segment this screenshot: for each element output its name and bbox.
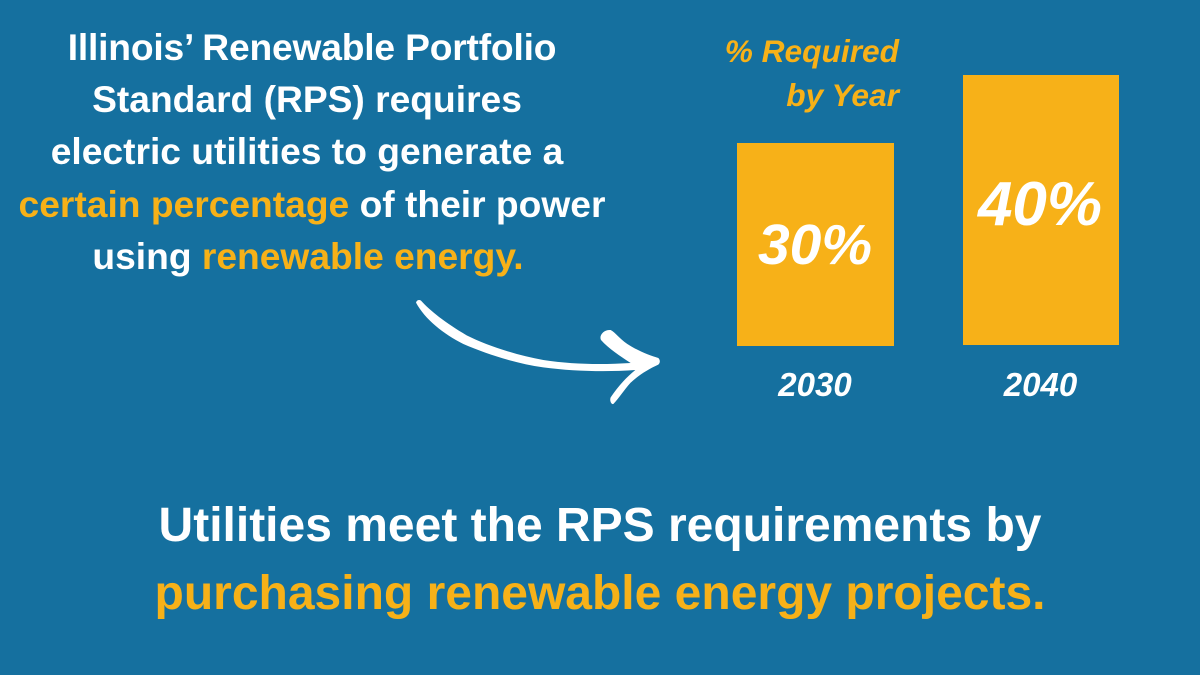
intro text block: [19, 26, 605, 277]
arrow: [416, 300, 660, 404]
intro text block: using renewable energy.: [92, 235, 524, 277]
bar 2030: [737, 143, 894, 346]
chart title: by Year: [786, 77, 899, 113]
value 40%: 40%: [978, 170, 1102, 239]
intro text block: Standard (RPS) requires: [92, 78, 522, 120]
intro text block: certain percentage of their power: [19, 183, 605, 225]
bottom statement: [155, 499, 1045, 620]
year label 2030: 2030: [778, 366, 852, 403]
bottom statement: Utilities meet the RPS requirements by: [159, 499, 1041, 552]
year label 2040: 2040: [1004, 366, 1077, 403]
intro text block: electric utilities to generate a: [51, 130, 563, 172]
bar 2040: [962, 75, 1119, 345]
value 30%: 30%: [758, 212, 872, 276]
chart title: % Required: [725, 33, 899, 69]
bottom statement: purchasing renewable energy projects.: [155, 567, 1045, 620]
chart title: [725, 33, 900, 113]
intro text block: Illinois’ Renewable Portfolio: [68, 26, 556, 68]
